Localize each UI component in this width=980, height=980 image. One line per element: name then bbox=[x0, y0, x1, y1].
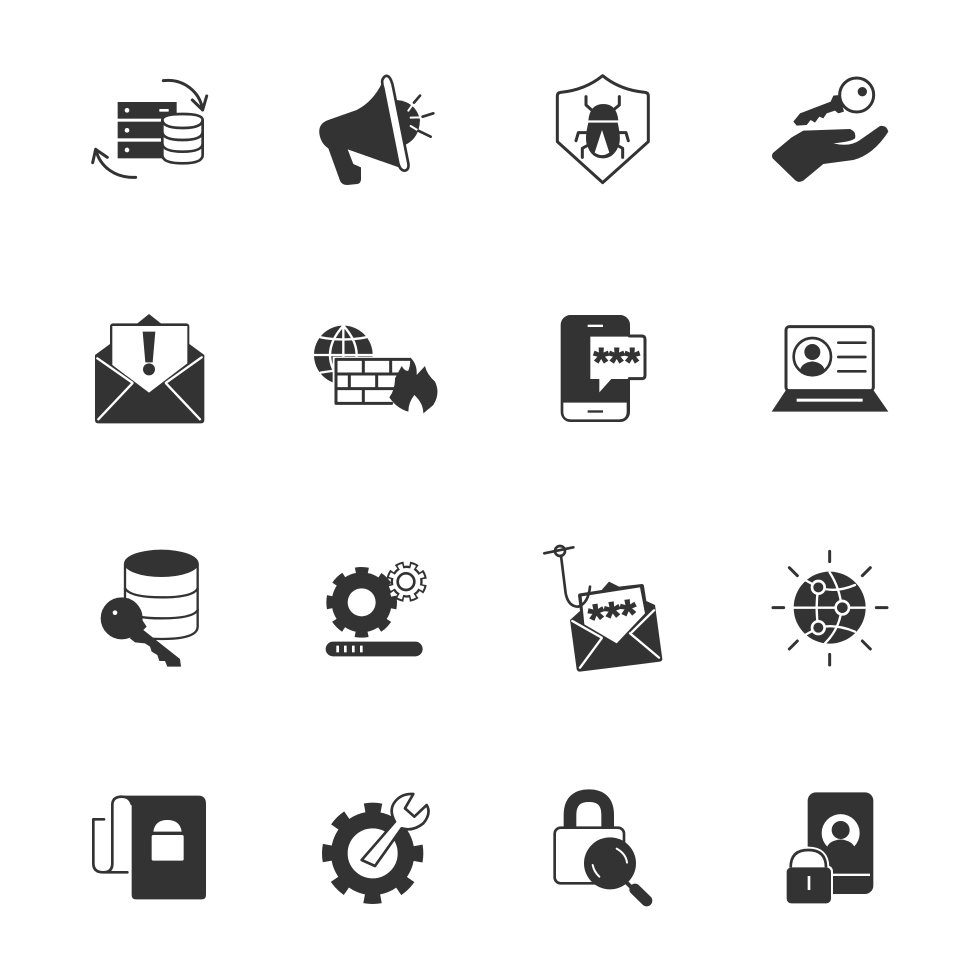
icon: firewall with globe and flame bbox=[314, 325, 437, 413]
icon: shield with bug bbox=[557, 76, 648, 183]
icon: phishing hook with email bbox=[544, 546, 662, 672]
icon: phone with password bubble: *** bbox=[593, 340, 640, 384]
icon: locked document bbox=[93, 796, 206, 899]
icon: megaphone bbox=[319, 76, 433, 185]
icon: gear with wrench bbox=[327, 794, 429, 899]
icon: email alert bbox=[95, 314, 204, 423]
icon: user card with padlock bbox=[785, 792, 873, 905]
icon: phishing hook with email: *** bbox=[586, 590, 641, 643]
icon: database and server sync bbox=[93, 80, 207, 177]
icon: global network bbox=[773, 551, 887, 665]
icon: key over hand bbox=[772, 78, 888, 182]
icon: settings gears with progress bar bbox=[326, 559, 429, 656]
icon: database with key bbox=[101, 550, 199, 667]
icon: phone with password bubble bbox=[561, 316, 645, 421]
icon: laptop with user profile bbox=[772, 327, 888, 412]
icon: padlock with magnifier bbox=[555, 796, 647, 901]
